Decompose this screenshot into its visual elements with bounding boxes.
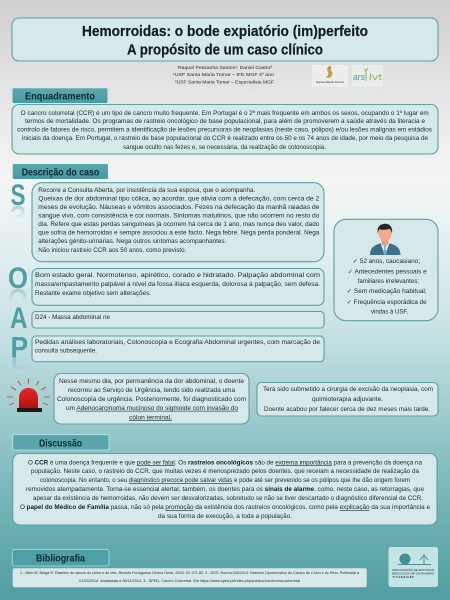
- panel: outcome: quimioterapia adjuvante.: [312, 396, 383, 403]
- authors and affiliations: Raquel Pessanha Santos¹; Daniel Castro²: [178, 65, 273, 70]
- panel: S (subjective): alterações génito-urinárias. Nega outros sintomas acompanhantes.: [38, 238, 227, 245]
- letter A: A: [10, 302, 28, 335]
- panel: A (assessment): [32, 312, 324, 328]
- panel: emergency visit: cólon terminal.: [129, 414, 172, 421]
- panel: Bibliografia references: [13, 568, 367, 587]
- panel: emergency visit: um Adenocarcinoma mucinoso do sigmoide com invasão do: [66, 405, 239, 412]
- logo: institution: TOMAR: [392, 575, 414, 579]
- logo: institution: [388, 547, 438, 587]
- panel: Enquadramento text: O cancro colorretal (CCR) é um tipo de cancro muito frequente. Em Portugal é o 2º mais frequente em ambos os sexos, ocupando o 1º lugar em: [21, 110, 429, 117]
- panel: O (objective): Restante exame objetivo sem alterações.: [35, 290, 151, 297]
- logo: institution: ASSOCIAÇÃO DE ESTUDOS: [392, 567, 434, 572]
- logo: ARS LVT: lvt: [369, 72, 383, 82]
- panel: P (plan): [32, 336, 324, 362]
- panel: Enquadramento text: [12, 104, 438, 154]
- letter S: S: [10, 179, 26, 212]
- authors and affiliations: ²USF Santa Maria Tomar – Especialista MGF: [175, 80, 274, 84]
- letter O: O: [8, 262, 28, 295]
- panel: S (subjective): que sofria de hemorroidas e sempre associou a este facto. Nega febre. Nega perda ponderal. Nega: [38, 229, 320, 236]
- letter P: [10, 332, 28, 384]
- panel: Discussão text: apesar da existência de hemorroidas, não devem ser desvalorizadas, sobretudo se não se tiver descartado o diagnóstico diferencial de CCR.: [33, 495, 423, 502]
- heading: Bibliografia: Bibliografia: [36, 554, 85, 564]
- panel: Enquadramento text: iniciais da doença. Em Portugal, o rastreio de base populacional do CCR é realizado entre os 50 e os 74 anos de idade, por meio da pesquisa de: [22, 135, 429, 142]
- panel: Discussão text: colonoscopia. No entanto, o seu diagnóstico precoce pode salvar vidas e pode até ser prevenido se os pólipos que lhe dão origem forem: [40, 477, 410, 484]
- icon: patient avatar: [370, 224, 400, 255]
- panel: S (subjective): dia. Refere que estas perdas sanguíneas já ocorrem há cerca de 1 ano, mas nunca deu valor, dado: [38, 221, 320, 228]
- panel: emergency visit: Colonoscopia de urgência. Posteriormente, foi diagnosticado com: [57, 396, 246, 403]
- panel: emergency visit: recorreu ao Serviço de Urgência, tendo sido realizada uma: [68, 387, 236, 394]
- panel: S (subjective): Queixas de dor abdominal tipo cólica, ao acordar, que alivia com a defecação, com cerca de 2: [38, 196, 320, 202]
- title: Hemorroidas: o bode expiatório (im)perfeito: [82, 24, 368, 40]
- patient characteristics list: ✓ Antecedentes pessoais e: [348, 269, 427, 276]
- logo: USF Santa Maria: Santa Maria Tomar: [316, 80, 344, 84]
- heading: Discussão: Discussão: [39, 438, 82, 449]
- panel: O (objective): [32, 268, 324, 305]
- patient characteristics list: [347, 258, 427, 316]
- panel: S (subjective): Não iniciou rastreio CCR aos 50 anos, como previsto.: [38, 247, 187, 254]
- panel: patient summary: [334, 219, 438, 321]
- panel: outcome: [257, 382, 438, 416]
- panel: Discussão text: da sua forma de execução, a toda a população.: [158, 513, 292, 520]
- panel: A (assessment): D24 - Massa abdominal ne: [35, 314, 111, 321]
- panel: S (subjective): sangue vivo, com consistência e cor normais. Sintomas matutinos, que não ocorrem no resto do: [38, 212, 320, 219]
- letter O: [8, 262, 28, 315]
- panel: Discussão text: O CCR é uma doença frequente e que pode ser fatal. Os rastreios oncológicos são de extrema importância para a prevenção da doença na: [28, 459, 423, 466]
- panel: outcome: Terá sido submetido a cirurgia de excisão da neoplasia, com: [263, 386, 433, 393]
- heading: Enquadramento: Enquadramento: [25, 92, 95, 102]
- panel: O (objective): massa/empastamento palpável a nível da fossa ilíaca esquerda, dolorosa à palpação, sem defesa.: [35, 281, 320, 288]
- logo: institution: MÉDICOS DA USF SANTA MARIA: [392, 570, 434, 576]
- title: [12, 18, 438, 61]
- panel: S (subjective): meses de evolução. Náuseas e vómitos associados. Fezes na defecação da manhã raiadas de: [38, 204, 320, 211]
- letter P: P: [10, 352, 28, 384]
- icon: red alarm siren: [7, 378, 50, 412]
- panel: outcome: Doente acabou por falecer cerca de dez meses mais tarde.: [264, 406, 430, 413]
- panel: P (plan): Pedidas análises laboratoriais, Colonoscopia e Ecografia Abdominal urgentes, com marcação de: [35, 339, 321, 346]
- panel: P (plan): consulta subsequente.: [35, 347, 97, 354]
- heading: Bibliografia: [12, 549, 109, 566]
- panel: S (subjective): [32, 183, 324, 262]
- heading: Descrição do caso: Descrição do caso: [22, 168, 99, 178]
- letter P: P: [10, 332, 28, 364]
- authors and affiliations: ¹USF Santa Maria Tomar – IFE MGF 4º ano: [173, 72, 275, 77]
- heading: Descrição do caso: [13, 164, 108, 179]
- title: A propósito de um caso clínico: [127, 42, 323, 58]
- panel: Discussão text: removidos atempadamente. Torna-se essencial alertar, também, os doentes para os sinais de alarme, como, neste caso, as retorragias, que: [26, 486, 425, 493]
- panel: emergency visit: [54, 374, 249, 424]
- authors and affiliations: [173, 65, 275, 84]
- panel: emergency visit: Nesse mesmo dia, por permanência da dor abdominal, o doente: [59, 378, 245, 385]
- patient characteristics list: ✓ Frequência esporádica de: [347, 299, 427, 306]
- letter O: O: [8, 282, 28, 315]
- panel: Bibliografia references: 01/03/2014. Atualizada a 06/11/2014. 3 - SPED. Cancro Colorretal. Em https://www.sped.pt/index.php/publico/carcinoma-colorretal: [79, 579, 300, 583]
- panel: Enquadramento text: sangue oculto nas fezes e, se necessária, da realização de colonoscopia.: [123, 144, 326, 151]
- logo: ARS LVT: ars: [353, 72, 365, 82]
- letter S: S: [10, 199, 26, 232]
- panel: Enquadramento text: controlo de fatores de risco, permitem a identificação de lesões precursoras de neoplasias (neste caso, pólipos) e/ou lesões malignas em estádios: [17, 126, 432, 134]
- panel: Discussão text: [13, 454, 437, 525]
- panel: Discussão text: população. Neste caso, o rastreio do CCR, que muitas vezes é menosprezado pelos doentes, que receiam a necessidade de realização da: [31, 468, 420, 475]
- letter S: [10, 179, 26, 232]
- panel: S (subjective): Recorre a Consulta Aberta, por insistência da sua esposa, que o acompanha.: [38, 187, 256, 194]
- panel: Bibliografia references: 1 - Melo M, Braga R. Rastreio do cancro do cólon e do reto. Revista Portuguesa Clínica Geral, 2003; 19: 471-82. 2 - DGS. Norma 003/2014: Rastreio Oportunístico do Cancro do Cólon e do Reto. Publicada a: [20, 571, 359, 575]
- panel: Enquadramento text: termos de mortalidade. Os programas de rastreio oncológico de base populacional, para além de promoverem a saúde através da literacia e: [25, 118, 426, 125]
- heading: Discussão: [13, 435, 109, 450]
- panel: O (objective): Bom estado geral. Normotenso, apirético, corado e hidratado. Palpação abdominal com: [35, 272, 320, 279]
- panel: Discussão text: O papel do Médico de Família passa, não só pela promoção da existência dos rastreios oncológicos, como pela explicação da sua importância e: [20, 504, 431, 511]
- logo: USF Santa Maria: [312, 65, 348, 87]
- patient characteristics list: vindas à USF.: [371, 309, 408, 316]
- patient characteristics list: ✓ 52 anos, caucasiano;: [353, 258, 420, 265]
- logo: ARS LVT: [352, 65, 383, 87]
- heading: Enquadramento: [12, 88, 108, 103]
- patient characteristics list: ✓ Sem medicação habitual;: [347, 288, 427, 295]
- patient characteristics list: familiares irrelevantes;: [358, 278, 419, 285]
